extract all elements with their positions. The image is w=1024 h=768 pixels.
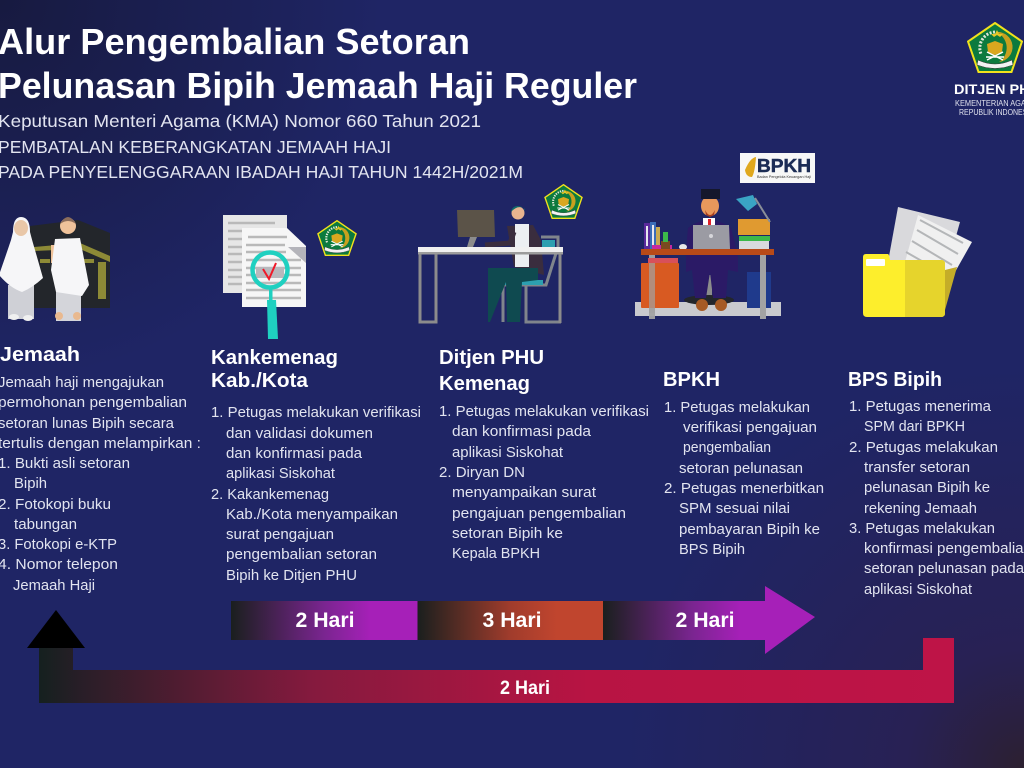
text block: Ditjen PHU steps: pengajuan pengembalian [452,506,626,522]
floor [635,302,781,316]
text block: Jemaah steps: Jemaah Haji [13,578,95,594]
chair [503,237,561,322]
text block: BPKH steps: verifikasi pengajuan [683,420,817,436]
text block: Ditjen PHU steps: 2. Diryan DN [439,465,525,481]
text block: BPS Bipih steps: setoran pelunasan pada [864,561,1024,577]
text block: Jemaah steps: tertulis dengan melampirkan : [0,436,201,452]
desk and cabinet [641,249,774,319]
text block: BPS Bipih steps: 3. Petugas melakukan [849,521,995,537]
text block: Jemaah steps: 3. Fotokopi e-KTP [0,537,117,553]
text block: BPKH steps: pengembalian [683,440,771,456]
text block: Kankemenag steps: aplikasi Siskohat [226,466,335,482]
text block: Kankemenag steps [211,405,421,584]
text block: Ditjen PHU steps: dan konfirmasi pada [452,424,592,440]
text block: BPKH steps: SPM sesuai nilai [679,501,790,517]
segment: Ditjen PHU 3 days [418,601,603,640]
text block: BPS Bipih steps: 2. Petugas melakukan [849,440,998,456]
text block: BPKH steps: 1. Petugas melakukan [664,400,810,416]
text block: Kankemenag steps: Kab./Kota menyampaikan [226,507,398,523]
text block: Kankemenag steps: 1. Petugas melakukan verifikasi [211,405,421,421]
text block: BPS Bipih steps: 1. Petugas menerima [849,399,992,415]
segment: Kankemenag 2 days: 2 Hari [296,609,354,632]
text block: Kankemenag steps: dan validasi dokumen [226,426,373,442]
text block: BPS Bipih steps: aplikasi Siskohat [864,582,972,598]
heading: Ditjen PHU Kemenag [439,347,544,395]
duration label: 2 Hari [500,678,550,699]
text block: Kankemenag steps: pengembalian setoran [226,547,377,563]
segment: Kankemenag 2 days [231,601,418,640]
arrow shaft [39,638,954,703]
text block: BPKH steps: 2. Petugas menerbitkan [664,481,824,497]
icon: documents with magnifier [223,215,306,339]
woman pilgrim [0,217,43,321]
text block: Ditjen PHU steps: Kepala BPKH [452,546,540,562]
arrow: forward process durations [231,586,815,654]
subtitle: legal basis [0,111,523,182]
heading: Kankemenag Kab./Kota: Kab./Kota [211,370,309,392]
text block: Kankemenag steps: Bipih ke Ditjen PHU [226,568,357,584]
icon: small emblem Ditjen PHU [545,185,582,218]
text block: Jemaah steps: permohonan pengembalian [0,395,187,411]
text block: BPKH steps: pembayaran Bipih ke [679,522,820,538]
text block: Kankemenag steps: dan konfirmasi pada [226,446,363,462]
segment: Ditjen PHU 3 days: 3 Hari [482,609,542,632]
boxes and lamp [736,195,770,249]
icon: officer at desk [418,206,563,323]
heading: BPS Bipih: BPS Bipih [848,369,942,391]
icon: pilgrims and Kaaba [0,217,110,321]
heading: Kankemenag Kab./Kota [211,347,338,392]
text block: Kankemenag steps: surat pengajuan [226,527,334,543]
arrow: return path to Jemaah [27,610,954,703]
text block: Ditjen PHU steps: aplikasi Siskohat [452,445,563,461]
text block: Ditjen PHU steps [439,404,649,562]
magnifier [252,252,288,339]
chair and officer [684,189,738,311]
text block: Jemaah steps: Bipih [14,476,47,492]
back document [223,215,287,293]
text block: Jemaah steps [0,375,201,594]
mouse [679,244,687,250]
binders and plant [644,222,672,249]
text block: Jemaah steps: 1. Bukti asli setoran [0,456,130,472]
arrow head [27,610,85,648]
laptop [693,225,730,249]
logo text [954,81,1024,117]
text block: BPS Bipih steps: SPM dari BPKH [864,419,965,435]
text block: Jemaah steps: 2. Fotokopi buku [0,497,111,513]
text block: Jemaah steps: Jemaah haji mengajukan [0,375,164,391]
desk [418,247,563,323]
heading: Jemaah: Jemaah [0,344,80,366]
heading: Kankemenag Kab./Kota: Kankemenag [211,347,338,369]
bin [747,272,771,308]
title: Pelunasan Bipih Jemaah Haji Reguler [0,65,637,106]
text block: Jemaah steps: tabungan [14,517,77,533]
papers [888,207,972,288]
text block: Jemaah steps: 4. Nomor telepon [0,557,118,573]
subtitle: legal basis: PEMBATALAN KEBERANGKATAN JEMAAH HAJI [0,137,391,157]
folder front [863,254,945,317]
monitor [457,210,495,247]
subtitle: legal basis: Keputusan Menteri Agama (KMA) Nomor 660 Tahun 2021 [0,111,481,131]
logo: BPKH: Badan Pengelola Keuangan Haji [757,174,811,179]
man pilgrim [51,217,89,321]
text block: BPS Bipih steps: transfer setoran [864,460,970,476]
icon: BPKH officer at desk [635,189,781,319]
text block: BPS Bipih steps: konfirmasi pengembalian [864,541,1024,557]
segment: BPKH 2 days [603,586,815,654]
officer [485,206,544,322]
title [0,21,637,106]
logo: BPKH: BPKH [757,156,811,176]
heading: BPKH: BPKH [663,369,720,391]
text block: Jemaah steps: setoran lunas Bipih secara [0,416,175,432]
text block: Kankemenag steps: 2. Kakankemenag [211,487,329,503]
Kaaba [30,220,110,308]
text block: Ditjen PHU steps: 1. Petugas melakukan verifikasi [439,404,649,420]
subtitle: legal basis: PADA PENYELENGGARAAN IBADAH HAJI TAHUN 1442H/2021M [0,162,523,182]
logo: Ditjen PHU [954,23,1024,117]
icon: yellow folder with papers [863,207,972,317]
title: Alur Pengembalian Setoran [0,21,470,62]
heading: Ditjen PHU Kemenag: Ditjen PHU [439,347,544,369]
text block: BPKH steps [664,400,824,558]
text block: BPS Bipih steps [849,399,1024,598]
text block: BPS Bipih steps: pelunasan Bipih ke [864,480,990,496]
logo: BPKH [740,153,815,183]
text block: Ditjen PHU steps: menyampaikan surat [452,485,596,501]
text block: Ditjen PHU steps: setoran Bipih ke [452,526,563,542]
text block: BPKH steps: setoran pelunasan [679,461,803,477]
folder back flap [945,267,957,310]
text block: BPKH steps: BPS Bipih [679,542,745,558]
front document [242,228,306,307]
icon: ministry emblem [968,23,1022,72]
icon: small emblem Kankemenag [318,221,356,255]
text block: BPS Bipih steps: rekening Jemaah [864,501,977,517]
heading: Ditjen PHU Kemenag: Kemenag [439,373,530,395]
segment: BPKH 2 days: 2 Hari [676,609,734,632]
